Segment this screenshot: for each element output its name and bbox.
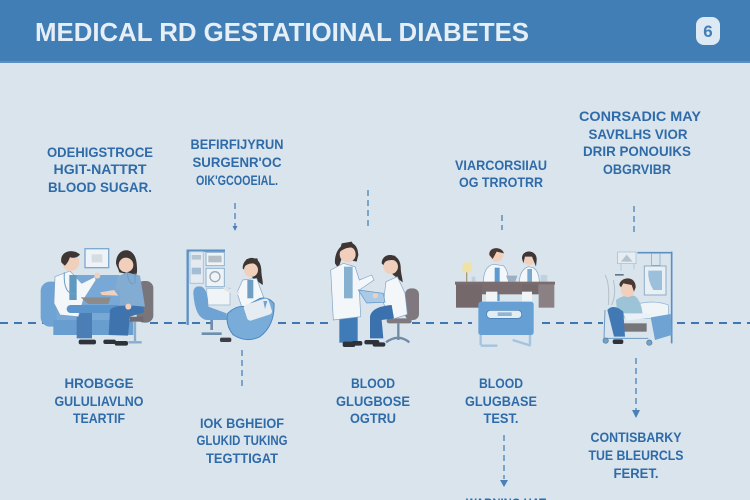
text: top caption 1: BLOOD SUGAR. [48, 179, 152, 195]
icon: step number badge [696, 17, 720, 45]
text: top caption 2: OIK'GCOOEIAL. [196, 172, 278, 188]
timeline dashed line [0, 322, 750, 324]
text: top caption 1: HGIT-NATTRT [54, 161, 147, 177]
arrows: top connectors [232, 190, 634, 232]
text: top caption 2: SURGENR'OC [192, 154, 282, 170]
text: bottom caption 1: GULULIAVLNO [54, 393, 144, 409]
text: top caption 4: VIARCORSIIAU [455, 157, 547, 173]
text: top caption 5: CONRSADIC MAY [579, 108, 702, 124]
title: MEDICAL RD GESTATIOINAL DIABETES [35, 17, 529, 47]
scene 5: patient sitting on hospital bed with IV pole [603, 252, 672, 345]
text: bottom caption 1 [54, 375, 144, 426]
text: top caption 5: DRIR PONOUIKS [583, 143, 691, 159]
text: top caption 4: OG TRROTRR [459, 174, 543, 190]
text: top caption 5: SAVRLHS VIOR [588, 126, 688, 142]
text: bottom caption 3: GLUGBOSE [336, 393, 410, 409]
icon: step number badge: 6 [703, 22, 713, 41]
text: bottom caption 2: IOK BGHEIOF [200, 415, 284, 431]
text: bottom caption 3: OGTRU [350, 410, 396, 426]
text: bottom caption 3 [336, 375, 410, 426]
header banner [0, 0, 750, 63]
scene 3: standing doctor and seated colleague with clipboard [331, 242, 419, 347]
text: bottom caption 2: GLUKID TUKING [196, 432, 288, 448]
text: bottom caption 5: CONTISBARKY [590, 429, 682, 445]
scene 4: two doctors at desk behind hospital bed [455, 248, 555, 346]
text: bottom caption 5: TUE BLEURCLS [588, 447, 684, 463]
text: bottom caption 3: BLOOD [351, 375, 395, 391]
arrows: bottom connectors [242, 350, 640, 487]
text: bottom caption 1: TEARTIF [73, 410, 125, 426]
text: top caption 1: ODEHIGSTROCE [47, 144, 153, 160]
text: bottom caption 4 [465, 375, 537, 426]
text: top caption 4 [455, 157, 547, 190]
scene 2: clinician seated with shelving [187, 250, 274, 342]
text: bottom caption 4: BLOOD [479, 375, 523, 391]
text: bottom caption 2 [196, 415, 288, 466]
text: top caption 5: OBGRVIBR [603, 161, 671, 177]
text: top caption 2 [190, 136, 284, 188]
text: bottom caption 2: TEGTTIGAT [206, 450, 278, 466]
scene 1: doctor and patient consultation [41, 249, 153, 346]
text: bottom caption 5 [588, 429, 684, 481]
text: top caption 2: BEFIRFIJYRUN [190, 136, 284, 152]
text: bottom caption 1: HROBGGE [64, 375, 134, 391]
text: top caption 5 [579, 108, 702, 177]
text: bottom caption 4: TEST. [484, 410, 518, 426]
text: bottom caption 5: FERET. [614, 465, 658, 481]
text: top caption 1 [47, 144, 153, 195]
text: bottom caption 4: GLUGBASE [465, 393, 537, 409]
